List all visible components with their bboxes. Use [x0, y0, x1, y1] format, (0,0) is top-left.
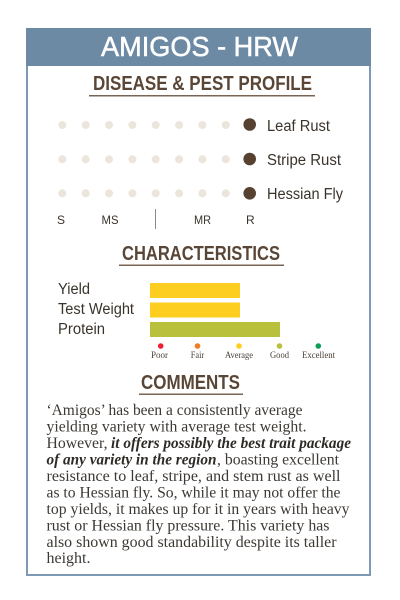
text block: comments body: resistance to leaf, stripe, and stem rust as well [46, 468, 341, 485]
text block: comments body: However, [46, 435, 108, 452]
row: hessian fly: Hessian Fly [267, 186, 343, 203]
legend: rating colours: Fair [191, 350, 204, 360]
panel: variety card [26, 28, 371, 575]
text block: comments body: also shown good standability despite its taller [46, 534, 337, 551]
heading: disease and pest profile: DISEASE & PEST PROFILE [93, 73, 312, 95]
heading: comments: COMMENTS [141, 372, 240, 394]
text block: comments body: rust or Hessian fly pressure. This variety has [46, 518, 330, 534]
bar: protein: Protein [58, 321, 105, 338]
legend: rating colours: Excellent [302, 350, 335, 360]
scale axis labels: MR [194, 213, 211, 227]
bar chart: characteristics [58, 281, 280, 338]
bar: test weight: Test Weight [58, 301, 135, 318]
bar: yield [58, 281, 240, 298]
chart: disease resistance dot scale [57, 118, 343, 229]
text block: comments body: ‘Amigos’ has been a consistently average [46, 402, 302, 419]
text block: comments body: yielding variety with average test weight. [46, 418, 306, 436]
row: hessian fly [58, 186, 343, 203]
title banner [26, 28, 371, 66]
bar: yield: Yield [58, 281, 90, 298]
scale axis labels: S [57, 213, 65, 227]
scale axis labels [57, 209, 255, 229]
legend: rating colours: Good [270, 350, 289, 360]
text block: comments body: , boasting excellent [217, 452, 340, 468]
text block: comments body [46, 402, 351, 567]
bar: protein [58, 321, 280, 338]
scale axis labels: MS [102, 213, 118, 227]
row: stripe rust: Stripe Rust [267, 152, 342, 169]
title banner: AMIGOS - HRW [101, 31, 299, 62]
scale axis labels: R [246, 213, 255, 227]
text block: comments body: as to Hessian fly. So, while it may not offer the [46, 484, 340, 502]
heading: characteristics: CHARACTERISTICS [122, 243, 280, 265]
row: leaf rust: Leaf Rust [267, 118, 331, 135]
legend: rating colours: Poor [151, 350, 168, 360]
text block: comments body: height. [46, 550, 90, 567]
row: stripe rust [58, 152, 342, 169]
legend: rating colours: Average [225, 350, 253, 360]
bar: test weight [58, 301, 240, 318]
legend: rating colours [151, 343, 335, 360]
row: leaf rust [58, 118, 331, 135]
text block: comments body: of any variety in the region [46, 452, 217, 468]
text block: comments body: it offers possibly the best trait package [111, 435, 351, 452]
text block: comments body: top yields, it makes up for it in years with heavy [46, 501, 350, 518]
